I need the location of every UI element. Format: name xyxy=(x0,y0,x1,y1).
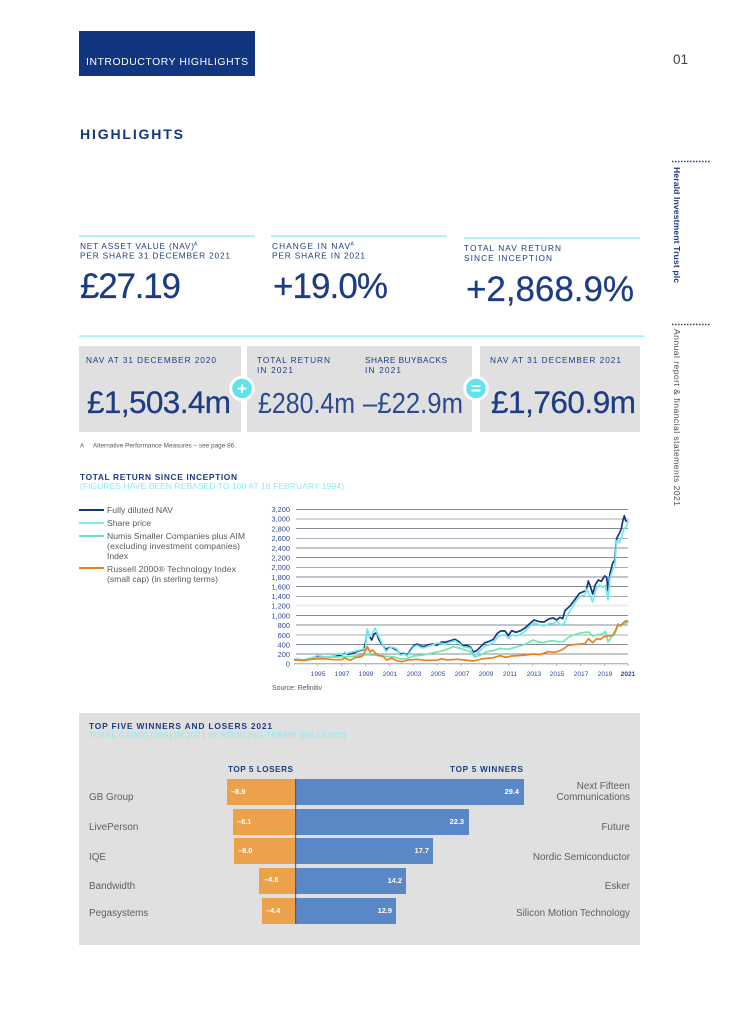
bars: losers: –4.8 xyxy=(264,875,278,884)
panel: NAV 2021: £1,760.9m xyxy=(491,384,636,420)
line chart: total return since inception xyxy=(272,505,636,692)
section header tab: INTRODUCTORY HIGHLIGHTS xyxy=(86,57,248,68)
stat: change in NAV: +19.0% xyxy=(273,267,388,306)
names: winners: Esker xyxy=(605,881,631,892)
y axis labels: 200 xyxy=(278,650,290,659)
stat: net asset value: £27.19 xyxy=(80,267,181,306)
y axis labels: 2,800 xyxy=(272,524,290,534)
x axis labels: 1999 xyxy=(359,671,374,678)
series: fully diluted NAV xyxy=(294,516,628,660)
y axis labels: 1,000 xyxy=(272,612,290,620)
stat: net asset value: A xyxy=(194,242,198,248)
heading: highlights: HIGHLIGHTS xyxy=(80,126,183,142)
x axis labels: 2009 xyxy=(479,671,494,678)
stat: change in NAV: A xyxy=(350,242,354,248)
chart heading: TOTAL RETURN SINCE INCEPTION xyxy=(80,472,237,482)
chart legend: (small cap) (in sterling terms) xyxy=(107,574,218,584)
icon: equals xyxy=(463,376,489,401)
column headings xyxy=(228,765,524,774)
names: winners: Future xyxy=(601,822,631,833)
x axis labels: 2021 xyxy=(621,671,636,678)
stat: total NAV return: SINCE INCEPTION xyxy=(464,253,552,263)
panel: total return and buybacks xyxy=(247,346,472,432)
source: Source: Refinitiv xyxy=(272,685,322,692)
bars: winners: 17.7 xyxy=(415,846,429,855)
x axis labels: 1997 xyxy=(335,671,350,678)
footnote: A xyxy=(80,442,85,450)
bars: winners xyxy=(296,779,524,924)
bars: losers: –8.1 xyxy=(237,817,251,826)
page number: 01 xyxy=(673,52,688,67)
x axis labels: 2005 xyxy=(431,671,446,678)
panel: total return and buybacks: £280.4m xyxy=(258,388,355,420)
chart legend: Russell 2000® Technology Index xyxy=(107,564,237,574)
panel: total return and buybacks: –£22.9m xyxy=(363,388,463,420)
panel: total return and buybacks: IN 2021 xyxy=(365,365,401,375)
bars: losers xyxy=(227,779,296,924)
panel: NAV 2020 xyxy=(79,346,241,432)
x axis labels: 2007 xyxy=(455,671,470,678)
bars: losers: –8.0 xyxy=(238,846,252,855)
y axis labels: 2,400 xyxy=(272,544,290,553)
stat: net asset value: PER SHARE 31 DECEMBER 2021 xyxy=(80,250,230,260)
chart heading: (FIGURES HAVE BEEN REBASED TO 100 AT 16 FEBRUARY 1994) xyxy=(80,481,344,491)
chart legend: Fully diluted NAV xyxy=(107,505,173,515)
bars: winners: 14.2 xyxy=(388,876,402,885)
icon: plus xyxy=(229,376,255,401)
x axis labels: 2017 xyxy=(574,671,589,678)
x axis labels xyxy=(311,671,636,678)
panel: top five winners and losers xyxy=(79,713,640,945)
y axis labels: 2,000 xyxy=(272,563,290,572)
panel: NAV 2020: NAV AT 31 DECEMBER 2020 xyxy=(86,355,216,365)
chart legend: (excluding investment companies) xyxy=(107,541,240,551)
stat: total NAV return: TOTAL NAV RETURN xyxy=(464,243,561,253)
stat: total NAV return: +2,868.9% xyxy=(466,270,634,309)
bars: winners: 22.3 xyxy=(450,817,464,826)
stat: change in NAV: CHANGE IN NAV xyxy=(272,241,350,251)
stat: net asset value: NET ASSET VALUE (NAV) xyxy=(80,241,194,251)
series: share price xyxy=(294,519,628,660)
panel: total return and buybacks: TOTAL RETURN xyxy=(257,355,330,365)
side label: company name: Herald Investment Trust plc xyxy=(672,167,682,283)
column headings: TOP 5 LOSERS xyxy=(228,765,294,774)
y axis labels: 1,600 xyxy=(272,582,290,592)
y axis labels: 1,800 xyxy=(272,573,290,582)
y axis labels xyxy=(272,505,290,668)
y axis labels: 3,000 xyxy=(272,514,290,524)
y axis labels: 1,200 xyxy=(272,602,290,610)
names: losers: Pegasystems xyxy=(89,908,148,919)
names: winners: Nordic Semiconductor xyxy=(533,852,631,863)
panel heading xyxy=(89,721,346,740)
y axis labels: 3,200 xyxy=(272,505,290,514)
x axis labels: 2011 xyxy=(503,671,517,678)
panel: NAV 2021 xyxy=(480,346,640,432)
chart heading xyxy=(80,472,344,491)
series: Russell index xyxy=(294,621,628,662)
bars: winners: 12.9 xyxy=(378,906,392,915)
stat: change in NAV xyxy=(271,236,447,306)
names: winners: Silicon Motion Technology xyxy=(516,908,630,919)
x axis labels: 2019 xyxy=(598,671,613,678)
y axis labels: 2,200 xyxy=(272,554,290,562)
bars: losers: –4.4 xyxy=(266,906,281,915)
y axis labels: 2,600 xyxy=(272,534,290,543)
x axis labels: 2001 xyxy=(383,671,398,678)
panel: NAV 2021: NAV AT 31 DECEMBER 2021 xyxy=(490,355,621,365)
y axis labels: 600 xyxy=(278,631,290,640)
panel: total return and buybacks: IN 2021 xyxy=(257,365,293,375)
y axis labels: 0 xyxy=(286,660,290,668)
x axis labels: 1995 xyxy=(311,671,326,678)
series: Numis index xyxy=(294,622,628,660)
names: losers: GB Group xyxy=(89,792,134,803)
panel: NAV 2020: £1,503.4m xyxy=(87,384,231,420)
column headings: TOP 5 WINNERS xyxy=(450,765,524,774)
x axis labels: 2013 xyxy=(527,671,542,678)
names: losers: Bandwidth xyxy=(89,881,135,892)
names: winners: Communications xyxy=(556,792,630,803)
bars: losers: –8.9 xyxy=(231,787,245,796)
footnote: Alternative Performance Measures – see page 86. xyxy=(93,442,236,450)
chart legend: Share price xyxy=(107,518,151,528)
x axis ticks xyxy=(317,664,628,666)
section header tab xyxy=(79,31,255,76)
chart legend xyxy=(79,505,245,584)
stat: total NAV return xyxy=(464,238,640,309)
names: winners xyxy=(516,781,631,919)
side label: report name: Annual report & financial statements 2021 xyxy=(672,329,682,506)
chart legend: Numis Smaller Companies plus AIM xyxy=(107,531,245,541)
side label: company name xyxy=(672,162,711,283)
panel heading: TOTAL GAIN/(LOSS) IN 2021 IN STERLING TERMS (MILLIONS) xyxy=(89,730,346,740)
names: losers: IQE xyxy=(89,852,106,863)
stat: change in NAV: PER SHARE IN 2021 xyxy=(272,250,365,260)
stat: net asset value xyxy=(79,236,255,306)
panel: total return and buybacks: SHARE BUYBACKS xyxy=(365,355,447,365)
bars: winners: 29.4 xyxy=(505,787,520,796)
panel heading: TOP FIVE WINNERS AND LOSERS 2021 xyxy=(89,721,272,731)
x axis labels: 2015 xyxy=(550,671,565,678)
names: losers xyxy=(89,792,148,919)
y axis labels: 800 xyxy=(278,621,290,630)
names: losers: LivePerson xyxy=(89,822,138,833)
y axis labels: 400 xyxy=(278,640,290,650)
x axis labels: 2003 xyxy=(407,671,422,678)
y axis labels: 1,400 xyxy=(272,592,290,601)
names: winners: Next Fifteen xyxy=(577,781,630,792)
chart legend: Index xyxy=(107,551,129,561)
